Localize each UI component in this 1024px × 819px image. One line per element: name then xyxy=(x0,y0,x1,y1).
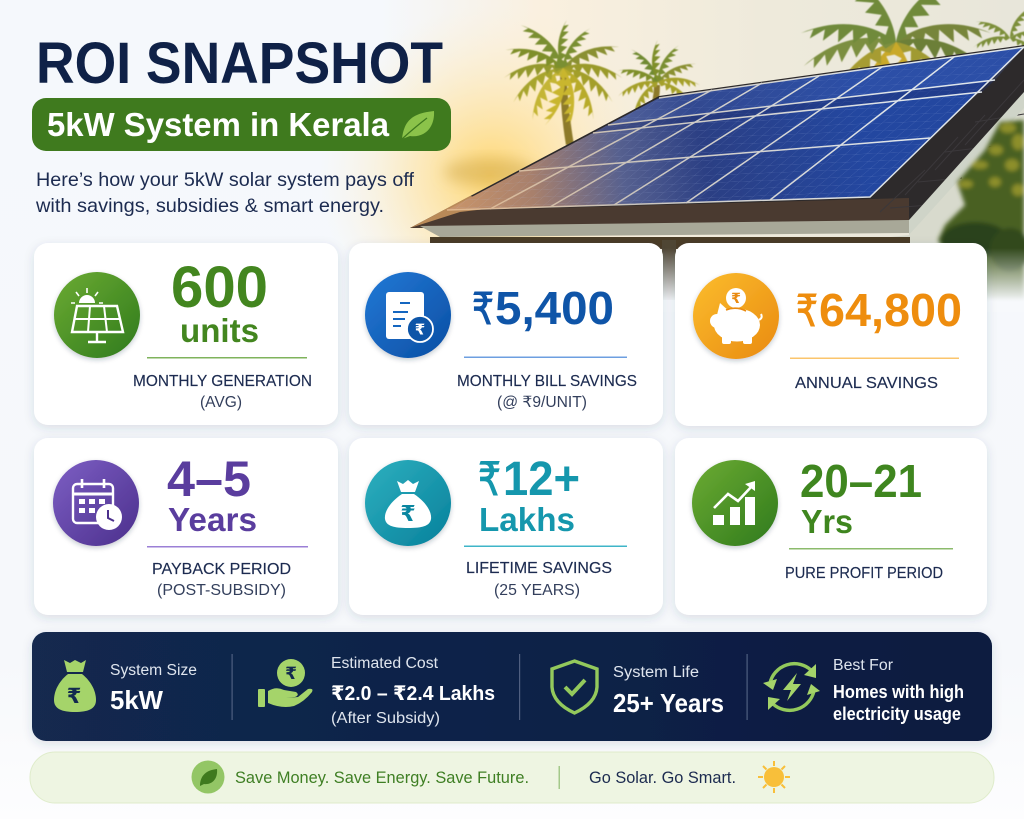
tagline strip: Go Solar. Go Smart. xyxy=(589,769,736,787)
icon: hand with coin: ₹ xyxy=(285,664,297,683)
estimated cost: ₹2.0 – ₹2.4 Lakhs xyxy=(331,683,495,705)
icon: bill: ₹ xyxy=(415,322,425,338)
tagline strip xyxy=(30,752,994,803)
second palm xyxy=(616,40,700,117)
icon: piggy bank xyxy=(693,273,779,359)
panel: payback period: 4–5 xyxy=(167,451,251,507)
panel: pure profit period: PURE PROFIT PERIOD xyxy=(785,565,943,582)
system size: System Size xyxy=(110,662,197,679)
icon: leaf xyxy=(402,111,434,139)
value: 12+ xyxy=(503,453,580,506)
best for: electricity usage xyxy=(833,704,961,724)
intro text: with savings, subsidies & smart energy. xyxy=(35,195,384,217)
panel array xyxy=(447,47,1024,210)
icon: bill xyxy=(365,272,451,358)
value: 5,400 xyxy=(495,282,614,334)
panel: pure profit period: 20–21 xyxy=(800,455,922,507)
panel: monthly bill savings xyxy=(349,243,663,425)
best for xyxy=(763,657,964,724)
icon: money bag: ₹ xyxy=(67,685,81,708)
icon: growth chart xyxy=(692,460,778,546)
hero photo: solar roof with palms xyxy=(310,0,1024,312)
panel: annual savings: ANNUAL SAVINGS xyxy=(795,375,938,392)
panel: payback period: PAYBACK PERIOD xyxy=(152,561,291,578)
title: ROI SNAPSHOT xyxy=(36,31,443,96)
value: 64,800 xyxy=(819,284,962,336)
value: ₹ xyxy=(796,287,818,336)
icon: sun xyxy=(758,761,790,793)
panel: pure profit period: Yrs xyxy=(801,503,853,540)
system life: 25+ Years xyxy=(613,688,724,718)
icon: money bag xyxy=(365,460,451,546)
icon: piggy bank: ₹ xyxy=(731,290,741,306)
panel: monthly generation: (AVG) xyxy=(200,394,242,411)
roof shingle lines xyxy=(880,80,1024,212)
icon: shield xyxy=(552,661,597,713)
system life xyxy=(552,661,724,718)
panel: annual savings xyxy=(675,243,987,426)
panel: lifetime savings: LIFETIME SAVINGS xyxy=(466,560,612,577)
panel: monthly generation: units xyxy=(180,312,259,349)
subtitle pill xyxy=(32,98,451,151)
icon: energy cycle xyxy=(763,664,820,710)
estimated cost: Estimated Cost xyxy=(331,655,439,672)
roof xyxy=(410,45,1024,228)
house wall xyxy=(880,105,1024,302)
panel: payback period xyxy=(34,438,338,615)
panel: monthly generation: MONTHLY GENERATION xyxy=(133,373,312,390)
value: ₹ xyxy=(472,285,494,334)
soffit xyxy=(430,237,910,249)
panel: lifetime savings: (25 YEARS) xyxy=(494,582,580,599)
estimated cost xyxy=(258,655,495,727)
panel: monthly generation: 600 xyxy=(171,255,268,320)
subtitle pill: 5kW System in Kerala xyxy=(47,106,390,143)
sky xyxy=(380,0,1024,250)
value: ₹ xyxy=(478,453,501,505)
sun glow xyxy=(310,0,670,250)
system life: System Life xyxy=(613,664,699,681)
tagline strip: Save Money. Save Energy. Save Future. xyxy=(235,769,529,787)
best for: Homes with high xyxy=(833,682,964,702)
intro text: Here’s how your 5kW solar system pays off xyxy=(36,169,415,191)
icon: money bag: ₹ xyxy=(400,501,416,526)
right palm xyxy=(800,0,1024,138)
best for: Best For xyxy=(833,657,893,674)
fade into page xyxy=(380,248,1024,302)
panel: lifetime savings xyxy=(349,438,663,615)
summary bar xyxy=(32,632,992,741)
left palm xyxy=(503,18,623,145)
panel: payback period: (POST-SUBSIDY) xyxy=(157,582,286,599)
estimated cost: (After Subsidy) xyxy=(331,710,440,727)
system size: 5kW xyxy=(110,685,163,715)
system size xyxy=(54,660,197,715)
panel: payback period: Years xyxy=(168,501,257,538)
panel: monthly bill savings: (@ ₹9/UNIT) xyxy=(497,394,587,411)
panel: pure profit period xyxy=(675,438,987,615)
eave and gutter xyxy=(420,220,909,237)
icon: leaf badge xyxy=(192,760,224,794)
icon: money bag xyxy=(54,660,96,712)
icon: solar panel xyxy=(54,272,140,358)
distant trees xyxy=(444,158,536,186)
icon: calendar and clock xyxy=(53,460,139,546)
intro text xyxy=(35,169,415,217)
panel: lifetime savings: Lakhs xyxy=(479,501,575,538)
veranda post xyxy=(662,240,676,300)
panel: monthly generation xyxy=(34,243,338,425)
panel: monthly bill savings: MONTHLY BILL SAVINGS xyxy=(457,373,637,390)
bush xyxy=(938,120,1024,300)
icon: hand with coin xyxy=(258,659,312,707)
